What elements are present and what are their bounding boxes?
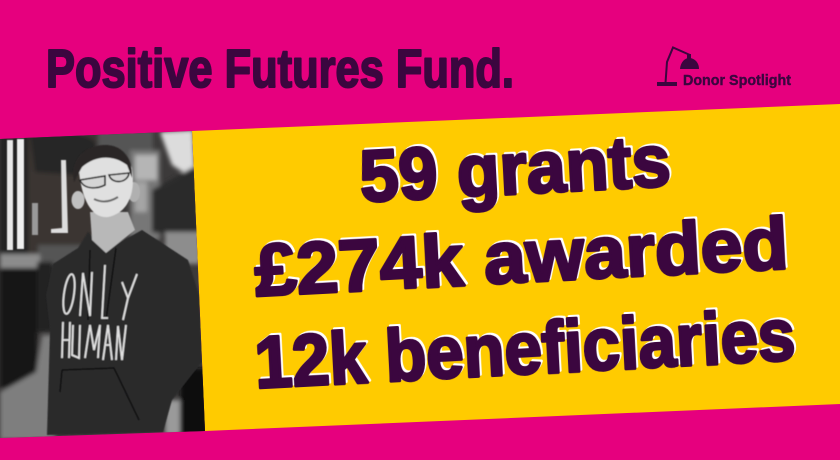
- hair: [73, 145, 132, 182]
- stat: 59 grants: 59 grants: [358, 121, 672, 218]
- mouth: [94, 197, 118, 201]
- stat: £274k awarded: £274k awarded: [253, 203, 790, 312]
- title: Positive Futures Fund.: [46, 39, 514, 99]
- ears: [72, 191, 84, 209]
- logo text: Donor Spotlight: [683, 72, 791, 89]
- photo: smiling young man in a hoodie: [0, 130, 210, 440]
- neck: [90, 212, 135, 253]
- hoodie strings: [88, 248, 116, 320]
- pocket: [60, 368, 139, 420]
- logo: Donor Spotlight: [657, 48, 791, 89]
- icon: desk lamp: [657, 48, 699, 86]
- shirt lettering: [61, 265, 137, 360]
- glasses: [80, 173, 129, 188]
- stat: 12k beneficiaries: 12k beneficiaries: [253, 295, 797, 404]
- hoodie: [46, 230, 202, 435]
- window frames: [7, 140, 13, 250]
- face: [79, 154, 133, 217]
- panel: yellow stats: [192, 104, 840, 431]
